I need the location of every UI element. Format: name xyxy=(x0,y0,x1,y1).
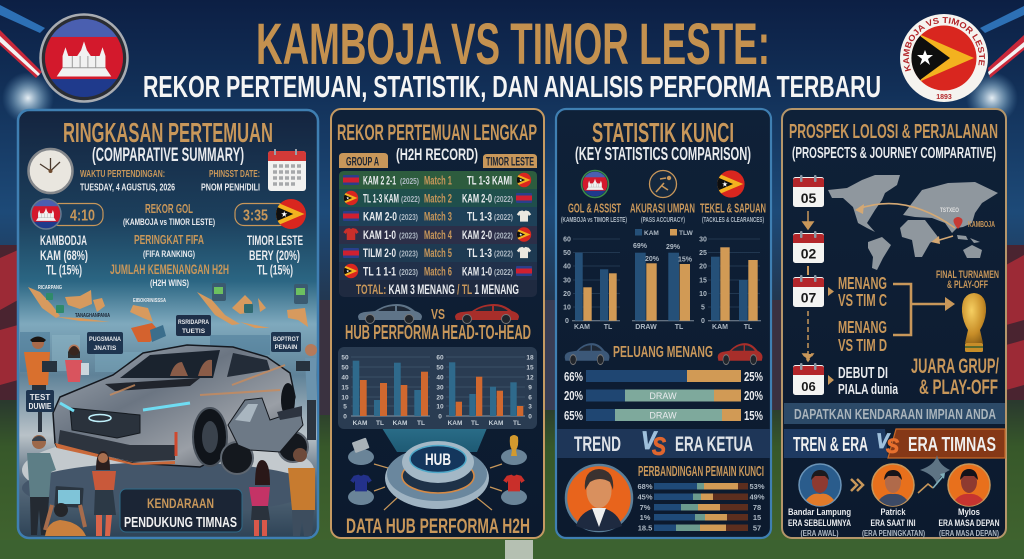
text: Timor Leste stats: BERY (20%) xyxy=(249,248,300,263)
key player comparison: 1% xyxy=(640,513,651,522)
person: woman with red top xyxy=(92,451,116,536)
key player comparison: 57 xyxy=(753,524,761,532)
row: match 6: TL 1 1-1 xyxy=(363,266,396,278)
person: orange shirt xyxy=(24,336,57,403)
row: match 4: KAM 1-0 xyxy=(363,230,396,242)
text: center labels: REKOR GOL xyxy=(145,201,193,216)
heading: ringkasan: RINGKASAN PERTEMUAN xyxy=(63,117,273,148)
bracket arrow xyxy=(893,284,955,335)
tag: timor leste: TIMOR LESTE xyxy=(486,154,534,168)
row: match 3 xyxy=(343,210,531,224)
sign: right callout: PENAIN xyxy=(275,345,297,351)
sign: center callout: RSRIDAPRA xyxy=(178,319,209,326)
text: Timor Leste stats xyxy=(247,233,303,278)
band: trend vs era ketua: V xyxy=(641,427,658,455)
row: match 5: Match 5 xyxy=(424,248,452,260)
row: match 3: Match 3 xyxy=(424,212,452,224)
chart axis labels: TL xyxy=(376,420,384,427)
row: match 5 xyxy=(343,247,531,260)
row: match 3: (2022) xyxy=(494,213,513,222)
key player comparison: PERBANDINGAN PEMAIN KUNCI xyxy=(638,463,764,480)
chart: pass accuracy: DRAW xyxy=(635,324,657,331)
sign: left callout xyxy=(87,332,123,354)
chart axis labels: 10 xyxy=(341,394,349,402)
chart axis labels: 0 xyxy=(343,414,347,420)
heading: hub performa: HUB PERFORMA HEAD-TO-HEAD xyxy=(345,322,531,344)
map: left archipelago: TANAGHANPANIA xyxy=(75,313,110,319)
text: final turnamen xyxy=(936,269,999,291)
era: mylos: Mylos xyxy=(958,507,980,518)
heading: statistik xyxy=(575,117,751,164)
icon: Cambodia flag medal xyxy=(40,14,128,102)
heading: prospek xyxy=(789,121,998,162)
sign: center callout: TUETIS xyxy=(182,328,206,335)
era: patrick: ERA SAAT INI xyxy=(870,518,916,529)
arrow: dashed xyxy=(803,311,813,361)
era: mylos: (ERA MASA DEPAN) xyxy=(939,529,999,538)
tag: group a xyxy=(339,153,388,168)
heading: ringkasan xyxy=(63,117,273,166)
row: match 2: (2022) xyxy=(401,195,420,204)
text: center labels: (H2H WINS) xyxy=(150,278,189,289)
chart axis labels: 20 xyxy=(436,394,444,402)
era: patrick: (ERA PENINGKATAN) xyxy=(862,529,925,538)
chart: tackles: 20 xyxy=(699,264,707,270)
bars: win chance: 65% xyxy=(564,409,583,423)
portrait: coach xyxy=(566,465,632,531)
chart: goals: 10 xyxy=(563,304,571,312)
sign: test drive: DUWIE xyxy=(28,402,52,411)
icon: calendar xyxy=(268,149,306,191)
legend xyxy=(635,229,694,237)
chart: pass accuracy: 29% xyxy=(666,244,681,251)
chart: tackles: 0 xyxy=(701,318,705,325)
chart: tackles: TL xyxy=(744,324,753,331)
chart: pass accuracy: 15% xyxy=(678,256,693,264)
chart: pass accuracy xyxy=(632,243,694,331)
text: match time xyxy=(80,169,175,194)
map: right archipelago xyxy=(197,283,308,328)
heading: rekor xyxy=(337,120,537,164)
row: match 1: KAM 2 2-1 xyxy=(363,176,396,188)
tag: timor leste xyxy=(483,154,537,168)
arrow: down xyxy=(803,211,813,229)
chart axis labels: 40 xyxy=(341,374,349,382)
chart axis labels: 50 xyxy=(436,364,444,372)
calendar: 02: 02 xyxy=(801,246,816,262)
bars: win chance: 20% xyxy=(744,389,763,403)
chart axis labels: 50 xyxy=(341,364,349,372)
text: center labels: (KAMBOJA vs TIMOR LESTE) xyxy=(123,217,215,228)
chart axis labels: 10 xyxy=(436,404,444,410)
chart: goals xyxy=(563,236,620,331)
person: woman pink xyxy=(249,460,270,536)
text: debut: DEBUT DI xyxy=(838,365,888,382)
chart: pass accuracy: TL xyxy=(675,324,684,331)
chart axis labels: TL xyxy=(417,420,425,427)
row: match 4: KAM 2-0 xyxy=(462,230,492,242)
score: Kamboja xyxy=(31,199,103,229)
text: center labels xyxy=(110,201,229,289)
chart: goals: TL xyxy=(604,324,613,331)
score: Timor Leste xyxy=(235,199,306,229)
key player comparison: 7% xyxy=(640,503,651,512)
chart axis labels: KAM xyxy=(393,420,407,427)
person: orange man xyxy=(288,448,315,536)
person: front teal shirt xyxy=(27,435,56,535)
row: match 5: TL 1-3 xyxy=(467,248,492,260)
text: debut: PIALA dunia xyxy=(838,381,898,398)
row: match 5: TILM 2-0 xyxy=(363,248,396,260)
row: match 1: Match 1 xyxy=(424,176,452,188)
heading: rekor: REKOR PERTEMUAN LENGKAP xyxy=(337,120,537,145)
row: match 6 xyxy=(344,264,532,278)
band: tren vs era timnas xyxy=(784,429,1005,458)
era: bandar lampung: ERA SEBELUMNYA xyxy=(788,518,851,529)
row: total: TOTAL: KAM 3 MENANG / TL 1 MENANG xyxy=(356,282,519,297)
row: match 4: Match 4 xyxy=(424,230,452,242)
calendar: 06: 06 xyxy=(801,379,816,394)
row: match 6: KAM 1-0 xyxy=(462,266,492,278)
era: mylos: ERA MASA DEPAN xyxy=(938,518,1000,529)
score: Kamboja: 4:10 xyxy=(70,208,95,224)
chart: performance bars xyxy=(338,347,537,429)
row: match 2 xyxy=(344,191,532,206)
caption: kendaraan pendukung: KENDARAAN xyxy=(147,495,214,511)
band: tren vs era timnas: TREN & ERA xyxy=(793,434,868,456)
row: match 4 xyxy=(343,227,531,242)
map: left archipelago xyxy=(28,285,166,342)
chart: goals: 0 xyxy=(565,318,569,325)
text: center labels: PERINGKAT FIFA xyxy=(134,232,204,247)
pedestal: trophy xyxy=(501,435,527,465)
title xyxy=(143,12,881,104)
calendar: 06 xyxy=(793,363,824,395)
person: tablet holder xyxy=(45,486,86,536)
chart axis labels: 40 xyxy=(436,374,444,382)
pedestal: red jersey xyxy=(501,475,527,505)
chart: tackles: 25 xyxy=(699,250,707,257)
text: date place: PHINSST DATE: xyxy=(209,169,260,180)
band: trend vs era ketua: TREND xyxy=(574,433,621,456)
panel: prospek lolosi xyxy=(782,109,1006,538)
chart: pass accuracy: 69% xyxy=(633,243,648,250)
calendar: 05 xyxy=(793,175,824,207)
text: center labels: JUMLAH KEMENANGAN H2H xyxy=(110,262,229,277)
row: match 6: (2022) xyxy=(494,268,513,277)
era: bandar lampung: (ERA AWAL) xyxy=(800,529,839,538)
pedestal: blue jersey xyxy=(348,475,374,505)
text: menang vs tim d: VS TIM D xyxy=(838,335,887,355)
key player comparison: 45% xyxy=(637,492,653,502)
win chance heading xyxy=(565,343,762,365)
chart: goals: KAM xyxy=(574,324,590,331)
text: debut xyxy=(838,365,898,398)
text: menang vs tim d: MENANG xyxy=(838,317,887,337)
world map: KAMBOJA xyxy=(968,219,995,229)
icon: growth arrow xyxy=(918,455,950,493)
text: stat headings: (PASS ACCURACY) xyxy=(641,217,685,224)
text: stat headings: (KAMBOJA vs TIMOR LESTE) xyxy=(561,217,627,224)
chart axis labels: TL xyxy=(513,420,521,427)
chart axis labels: 3 xyxy=(528,404,532,410)
row: match 5: (2023) xyxy=(399,250,418,258)
chart: tackles: 15 xyxy=(699,278,707,284)
text: Kamboja stats: TL (15%) xyxy=(46,262,82,278)
bars: win chance: 20% xyxy=(564,389,583,403)
key player comparison: 49% xyxy=(749,492,765,502)
icon: Timor Leste xyxy=(717,170,745,198)
row: match 2: (2022) xyxy=(494,195,513,204)
person: right presenter xyxy=(296,344,317,440)
key player comparison xyxy=(637,463,765,532)
win chance heading: PELUANG MENANG xyxy=(613,344,713,361)
chart axis labels: 12 xyxy=(526,374,534,382)
era: bandar lampung: Bandar Lampung xyxy=(788,507,851,518)
bars: win chance xyxy=(564,370,763,423)
chart: tackles: 10 xyxy=(699,291,707,298)
chart axis labels: TL xyxy=(471,420,479,427)
panel: rekor pertemuan lengkap xyxy=(331,109,544,538)
chart: goals: 50 xyxy=(563,250,571,257)
row: match 2: TL 1-3 KAM xyxy=(363,194,399,206)
tag: group a: GROUP A xyxy=(346,154,379,168)
text: date place: PNOM PENH/DILI xyxy=(201,182,260,194)
calendar: 02 xyxy=(793,231,824,263)
small pointers xyxy=(828,287,834,385)
sign: right callout: BOPTROT xyxy=(273,337,299,343)
showroom backdrop xyxy=(20,332,314,514)
people: attendees xyxy=(24,336,317,536)
text: stat headings: (TACKLES & CLEARANCES) xyxy=(702,217,764,224)
text: match time: TUESDAY, 4 AGUSTUS, 2026 xyxy=(80,182,175,194)
table: match records xyxy=(339,171,537,297)
hub device xyxy=(374,441,502,510)
row: match 2: Match 2 xyxy=(424,194,452,206)
chart axis labels xyxy=(341,354,534,427)
era: bandar lampung xyxy=(788,464,851,538)
chart: goals: 30 xyxy=(563,278,571,284)
icon: Timor Leste badge xyxy=(900,14,988,102)
text: Timor Leste stats: TL (15%) xyxy=(257,262,293,278)
caption: kendaraan pendukung xyxy=(120,489,242,532)
calendar: 07: 07 xyxy=(801,290,816,306)
illustration: concept car xyxy=(53,345,295,467)
text: stat headings: TEKEL & SAPUAN xyxy=(700,200,766,216)
text: center labels: (FIFA RANKING) xyxy=(143,249,195,260)
world map: TSTXEO xyxy=(940,208,959,214)
icon: clock xyxy=(28,149,72,193)
left chart bars xyxy=(353,361,428,416)
bars: win chance: 66% xyxy=(564,370,583,384)
band: trend vs era ketua: S xyxy=(652,433,666,461)
cars vs: VS xyxy=(431,306,445,323)
text: final turnamen: & PLAY-OFF xyxy=(947,279,988,291)
text: Timor Leste stats: TIMOR LESTE xyxy=(247,233,303,248)
key player comparison: 53% xyxy=(749,482,765,491)
bars: win chance: 15% xyxy=(744,409,763,423)
illustration: motorcycle xyxy=(221,398,308,474)
icon: trophy xyxy=(962,293,986,352)
sign: center callout xyxy=(176,315,211,336)
right chart bars xyxy=(449,362,523,416)
panel: ringkasan pertemuan xyxy=(18,110,318,538)
text: menang vs tim c xyxy=(838,273,887,310)
chart axis labels: 30 xyxy=(436,384,444,392)
row: match 4: (2023) xyxy=(399,232,418,240)
panel: statistik kunci xyxy=(556,109,771,538)
map: left archipelago: RICARPANG xyxy=(38,285,62,291)
band: tren vs era timnas: V xyxy=(876,430,891,453)
chart axis labels: 15 xyxy=(341,384,349,392)
text: Kamboja stats xyxy=(40,233,88,278)
era: patrick: Patrick xyxy=(880,507,906,518)
text: Kamboja stats: KAMBODJA xyxy=(40,233,87,248)
cars vs xyxy=(358,304,519,324)
sign: right callout xyxy=(271,332,301,352)
row: match 6: Match 6 xyxy=(424,266,452,278)
row: match 3: (2023) xyxy=(399,213,418,222)
text: match time: WAKTU PERTENDINGAN: xyxy=(80,169,165,180)
row: match 1 xyxy=(343,173,531,188)
text: stat headings xyxy=(561,200,766,224)
heading: data hub: DATA HUB PERFORMA H2H xyxy=(346,515,530,538)
bars: win chance: DRAW xyxy=(649,391,677,401)
world map xyxy=(828,175,998,270)
row: match 5: (2022) xyxy=(494,250,513,258)
text: date place xyxy=(201,169,260,194)
icon: Timor Leste badge: KAMBOJA VS TIMOR LESTE xyxy=(903,17,985,72)
heading: statistik: STATISTIK KUNCI xyxy=(592,117,734,148)
icon: Timor Leste badge: 1893 xyxy=(936,94,952,101)
connector xyxy=(807,266,809,275)
chart axis labels: 5 xyxy=(343,404,347,410)
pedestal: ticket xyxy=(348,438,374,465)
icon: pass accuracy xyxy=(650,170,676,198)
chart: tackles: 5 xyxy=(701,304,705,312)
row: match 6: (2023) xyxy=(399,268,418,277)
chart axis labels: 0 xyxy=(438,414,442,420)
sign: test drive: TEST xyxy=(30,393,50,402)
calendar: 07 xyxy=(793,275,824,307)
key player comparison: 78 xyxy=(753,503,761,512)
beam xyxy=(382,428,487,452)
text: juara grup xyxy=(911,355,999,399)
icon: Cambodia xyxy=(582,170,608,198)
calendar: 05: 05 xyxy=(801,190,816,206)
chart axis labels: KAM xyxy=(353,420,367,427)
chart axis labels: 60 xyxy=(436,354,444,362)
bars: win chance: DRAW xyxy=(649,410,677,420)
sign: left callout: JNATIS xyxy=(94,345,117,352)
key player comparison: 68% xyxy=(637,482,653,491)
key player comparison: 15 xyxy=(753,513,761,522)
row: match 3: TL 1-3 xyxy=(467,212,492,224)
era: patrick xyxy=(862,464,925,538)
hub device: HUB xyxy=(425,450,451,469)
text: menang vs tim d xyxy=(838,317,887,355)
legend: KAM xyxy=(644,230,659,237)
score: Timor Leste: 3:35 xyxy=(243,208,268,224)
chart: goals: 60 xyxy=(563,236,571,244)
map: left archipelago: EIBOKRINISSSA xyxy=(133,298,166,304)
band: trend vs era ketua: ERA KETUA xyxy=(675,433,753,456)
text: stat headings: AKURASI UMPAN xyxy=(630,200,695,216)
chart: goals: 40 xyxy=(563,264,571,270)
text: stat headings: GOL & ASSIST xyxy=(568,200,621,216)
text: Kamboja stats: KAM (68%) xyxy=(40,248,88,263)
era: mylos xyxy=(938,464,1000,538)
chart axis labels: KAM xyxy=(448,420,462,427)
row: match 4: (2022) xyxy=(494,232,513,240)
chart: goals: 20 xyxy=(563,291,571,298)
person: pink woman xyxy=(65,344,89,382)
chart axis labels: 15 xyxy=(526,364,534,372)
chart: tackles: KAM xyxy=(712,324,728,331)
chart axis labels: KAM xyxy=(489,420,503,427)
heading: ringkasan: (COMPARATIVE SUMMARY) xyxy=(92,145,244,166)
sign: test drive xyxy=(26,390,54,432)
text: menang vs tim c: MENANG xyxy=(838,273,887,293)
bars: win chance: 25% xyxy=(744,370,763,384)
chart: tackles: 30 xyxy=(699,236,707,244)
text: menang vs tim c: VS TIM C xyxy=(838,290,887,310)
band: tren vs era timnas: S xyxy=(886,435,899,458)
caption: kendaraan pendukung: PENDUKUNG TIMNAS xyxy=(124,514,237,531)
chart axis labels: 6 xyxy=(528,394,532,402)
key player comparison: 18.5 xyxy=(638,524,652,532)
row: match 2: KAM 2-0 xyxy=(462,194,492,206)
chart axis labels: 50 xyxy=(341,354,349,362)
row: match 1: (2025) xyxy=(400,177,419,186)
heading: rekor: (H2H RECORD) xyxy=(396,145,478,164)
row: match 1: TL 1-3 KAMI xyxy=(467,176,512,188)
chart: pass accuracy: 20% xyxy=(645,256,660,263)
chart axis labels: 0 xyxy=(528,414,532,420)
chart axis labels: 18 xyxy=(526,354,534,362)
chart: tackles xyxy=(699,236,761,331)
sign: left callout: PUGSMANA xyxy=(89,336,121,343)
band: trend vs era ketua xyxy=(557,427,770,461)
row: match 3: KAM 2-0 xyxy=(363,212,397,224)
chart axis labels: 9 xyxy=(528,384,532,392)
timeline xyxy=(793,175,824,395)
legend: TLW xyxy=(679,230,694,237)
heading: statistik: (KEY STATISTICS COMPARISON) xyxy=(575,144,751,164)
arrow: chevrons xyxy=(851,479,863,491)
